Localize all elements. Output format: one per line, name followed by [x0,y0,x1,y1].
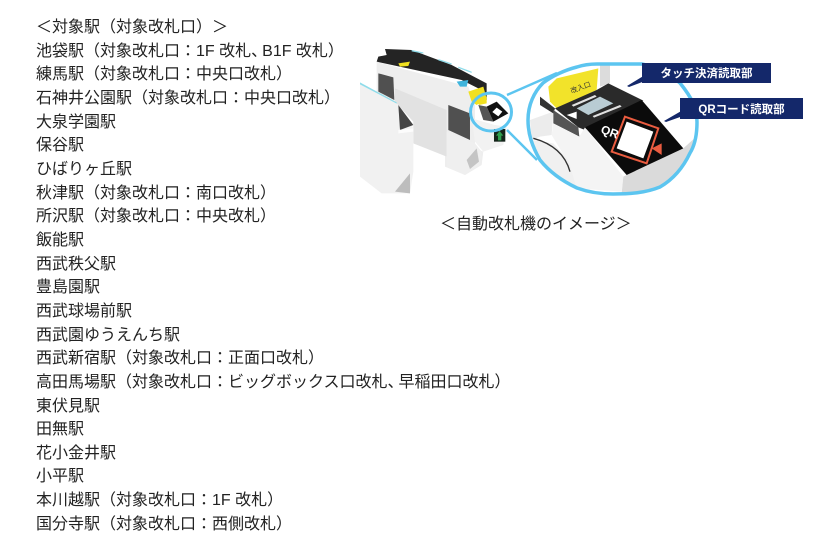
station list: 石神井公園駅（対象改札口：中央口改札） [36,90,340,107]
station list: 練馬駅（対象改札口：中央口改札） [36,66,292,83]
QR mark: QR [599,122,621,142]
station list: 高田馬場駅（対象改札口：ビッグボックス口改札、早稲田口改札） [36,374,511,391]
station list: 西武新宿駅（対象改札口：正面口改札） [36,350,324,367]
station list: ひばりヶ丘駅 [36,161,132,178]
station list: 池袋駅（対象改札口：1F 改札、B1F 改札） [36,43,344,60]
station list: 西武園ゆうえんち駅 [36,327,180,344]
station list: 西武球場前駅 [36,303,132,320]
illustration caption: ＜自動改札機のイメージ＞ [440,216,632,233]
station list: 本川越駅（対象改札口：1F 改札） [36,492,283,509]
station list: 東伏見駅 [36,398,100,414]
gate machine [360,49,508,193]
station list: ＜対象駅（対象改札口）＞ [36,19,228,36]
station list: 所沢駅（対象改札口：中央改札） [36,208,276,225]
yellow tag text: 改入口 [569,80,592,95]
label: QR code reader [664,98,803,122]
station list: 豊島園駅 [36,279,100,296]
enlarged reader detail [528,63,700,194]
connector lines [507,73,557,160]
station list: 西武秩父駅 [36,256,116,273]
station list: 国分寺駅（対象改札口：西側改札） [36,516,292,533]
label: touch payment reader: タッチ決済読取部 [660,66,753,80]
station list: 秋津駅（対象改札口：南口改札） [36,185,276,202]
automatic ticket gate illustration [360,49,803,196]
label: touch payment reader [627,63,771,87]
station list: 小平駅 [36,468,84,485]
station list: 大泉学園駅 [36,114,116,131]
small magnifier ring [470,93,512,131]
label: QR code reader: QRコード読取部 [698,102,785,116]
station list: 花小金井駅 [36,445,116,462]
station list: 保谷駅 [36,137,84,154]
station list [36,18,511,533]
station list: 田無駅 [36,421,84,438]
station list: 飯能駅 [36,232,84,249]
